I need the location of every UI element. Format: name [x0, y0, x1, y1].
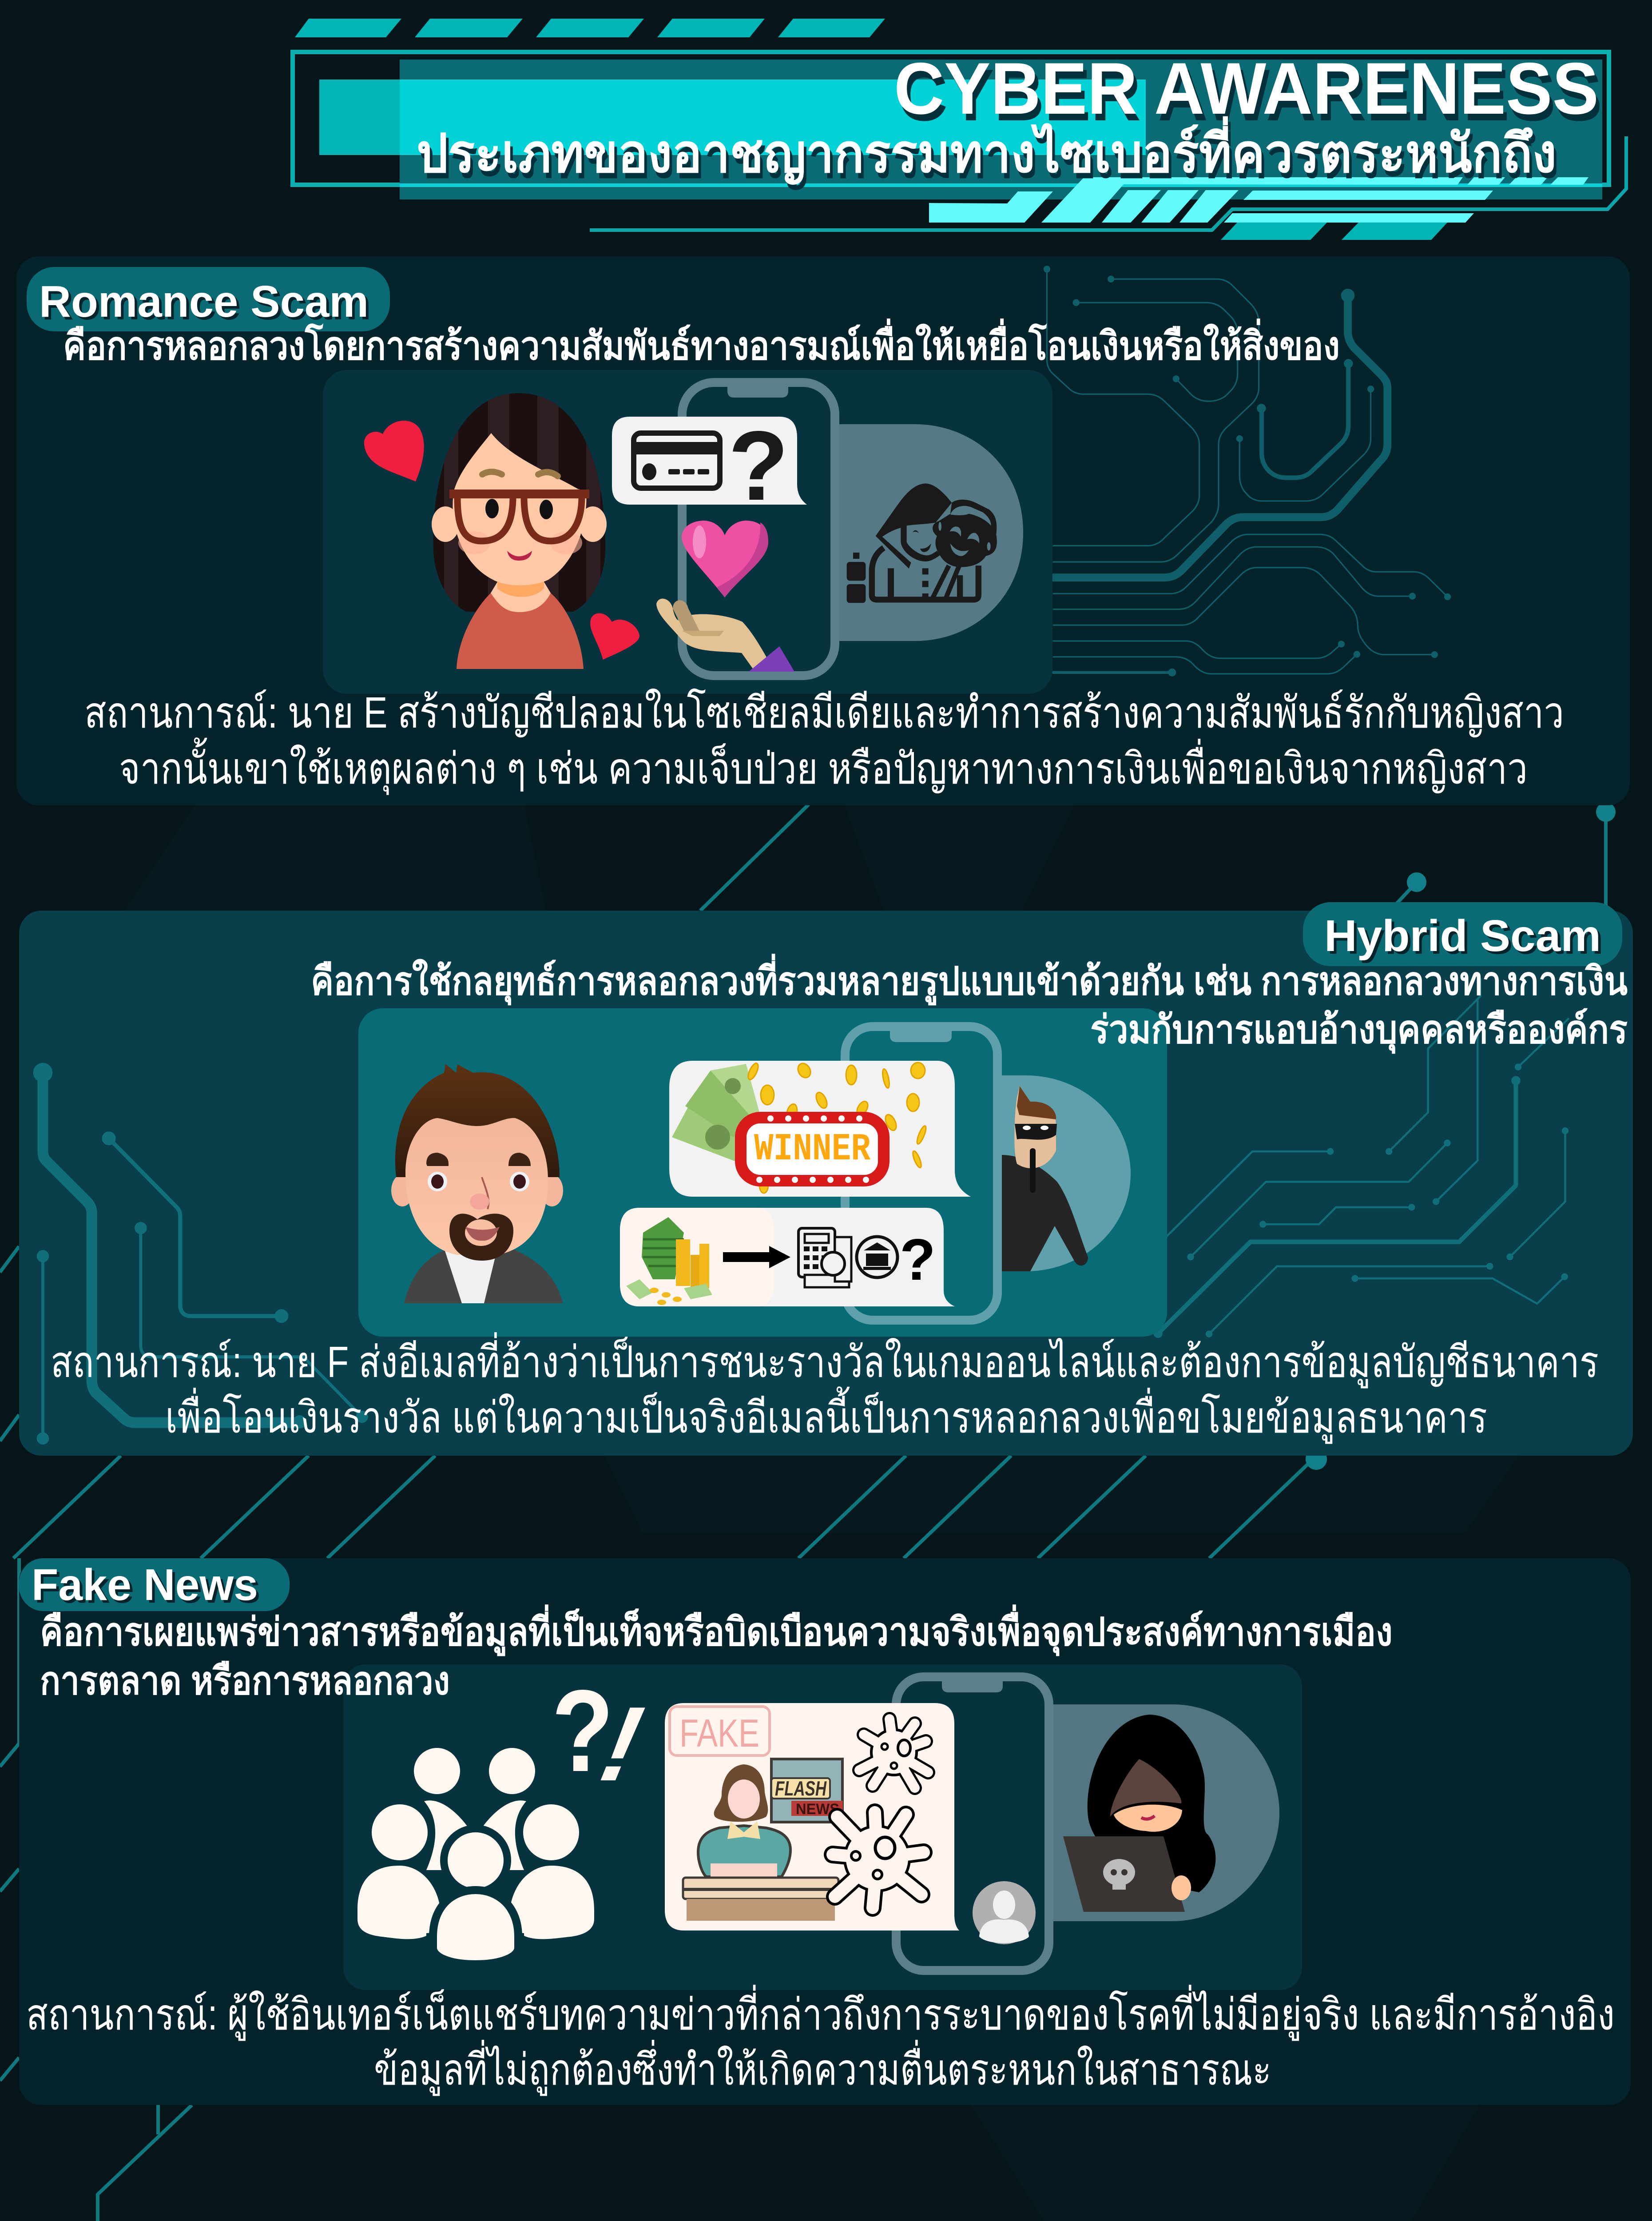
- header bright cyan shards: [929, 177, 1588, 223]
- panel background: [19, 911, 1633, 1456]
- icon: hacker: [1063, 1715, 1215, 1912]
- news anchor: [698, 1764, 790, 1878]
- header cyan block: [319, 80, 1146, 155]
- news board: FLASH: [775, 1777, 827, 1800]
- icon: virus large: [833, 1812, 924, 1908]
- icon: question and exclamation: [552, 1666, 664, 1803]
- definition: การตลาด หรือการหลอกลวง: [40, 1659, 450, 1703]
- scammer backdrop: [835, 424, 1023, 641]
- icon: bank documents: ?: [900, 1227, 936, 1292]
- definition: [40, 1604, 1393, 1703]
- second head: [933, 500, 997, 567]
- icon: red heart left: [364, 421, 424, 482]
- definition: [311, 954, 1628, 1054]
- speech bubble: bank details: [620, 1208, 955, 1306]
- header parallelograms: [295, 19, 885, 37]
- panel background: [16, 256, 1630, 805]
- heading pill: [1303, 902, 1622, 966]
- header teal block: [400, 60, 1602, 199]
- winner sign: [741, 1115, 884, 1183]
- icon: bank documents: [798, 1227, 936, 1292]
- illustration panel: [343, 1664, 1302, 1990]
- circuit traces: [1044, 266, 1451, 677]
- icon: scammer: [847, 483, 997, 603]
- speech bubble: winner: [669, 1061, 971, 1197]
- background circuit diagonals: [0, 804, 1606, 2194]
- title: CYBER AWARENESS: [894, 48, 1599, 129]
- money notes: [672, 1064, 764, 1162]
- icon: red heart right: [590, 613, 639, 660]
- panel: Fake News: [19, 1558, 1631, 2105]
- panel: Hybrid Scam: [19, 902, 1633, 1456]
- arrow: [723, 1246, 790, 1268]
- phone: [682, 382, 835, 676]
- heading: Fake News: [32, 1560, 258, 1610]
- icon: thief: [1002, 1086, 1088, 1271]
- circuit traces left: [33, 1063, 368, 1445]
- speech bubble: fake news: [665, 1703, 959, 1930]
- news board: NEWS: [796, 1801, 839, 1818]
- money stack: [626, 1217, 712, 1305]
- thief backdrop: [995, 1075, 1131, 1271]
- heading: Hybrid Scam: [1324, 911, 1601, 961]
- falling coins: [746, 1061, 928, 1193]
- circuit traces right: [1153, 979, 1569, 1338]
- subtitle: ประเภทของอาชญากรรมทางไซเบอร์ที่ควรตระหนักถึง: [417, 116, 1557, 185]
- winner sign: WINNER: [754, 1127, 870, 1171]
- header: [293, 19, 1626, 240]
- speech bubble: credit card: [612, 411, 807, 521]
- heading pill: [19, 1558, 290, 1611]
- speech bubble: credit card: ?: [728, 411, 789, 521]
- icon: virus small: [859, 1719, 928, 1788]
- heading pill: [27, 267, 390, 331]
- illustration panel: [323, 370, 1052, 694]
- definition: คือการเผยแพร่ข่าวสารหรือข้อมูลที่เป็นเท็จหรือบิดเบือนความจริงเพื่อจุดประสงค์ทางการเมือง: [40, 1604, 1393, 1656]
- header bright overlap: [400, 80, 1146, 155]
- news desk: [683, 1878, 838, 1921]
- header right circuit line: [590, 136, 1626, 230]
- icon: question and exclamation: ?: [552, 1666, 614, 1796]
- panel: Romance Scam: [16, 256, 1630, 805]
- header frame: [293, 52, 1609, 185]
- stamp: FAKE: FAKE: [679, 1711, 759, 1755]
- icon: question and exclamation: !: [581, 1685, 664, 1803]
- panel background: [19, 1558, 1631, 2105]
- illustration panel: [358, 1008, 1167, 1337]
- scenario text: [84, 688, 1564, 795]
- bottom left vertical trace: [96, 2193, 99, 2221]
- heading: Romance Scam: [39, 277, 369, 326]
- icon: pink heart: [682, 521, 768, 597]
- hood and face: [876, 483, 952, 569]
- hacker backdrop: [1048, 1704, 1279, 1921]
- body: [872, 548, 978, 600]
- icon: crowd: [357, 1748, 594, 1964]
- icon: bearded man: [391, 1064, 563, 1303]
- icon: woman: [432, 391, 607, 669]
- scenario text: ข้อมูลที่ไม่ถูกต้องซึ่งทำให้เกิดความตื่นตระหนกในสาธารณะ: [374, 2040, 1271, 2096]
- phone: [896, 1677, 1049, 1970]
- icon: user avatar: [973, 1881, 1036, 1944]
- definition: คือการหลอกลวงโดยการสร้างความสัมพันธ์ทางอารมณ์เพื่อให้เหยื่อโอนเงินหรือให้สิ่งของ: [63, 318, 1340, 368]
- scenario text: [26, 1985, 1615, 2096]
- scenario text: [51, 1332, 1599, 1444]
- bottle: [853, 553, 859, 559]
- background circuit nodes: [1306, 802, 1616, 1470]
- background hexagons: [124, 804, 1519, 2221]
- phone: [845, 1027, 997, 1320]
- header frame bottom overlay: [400, 183, 1602, 187]
- icon: hand: [656, 599, 794, 672]
- news board: [771, 1759, 843, 1822]
- header teal feet: [1221, 223, 1447, 240]
